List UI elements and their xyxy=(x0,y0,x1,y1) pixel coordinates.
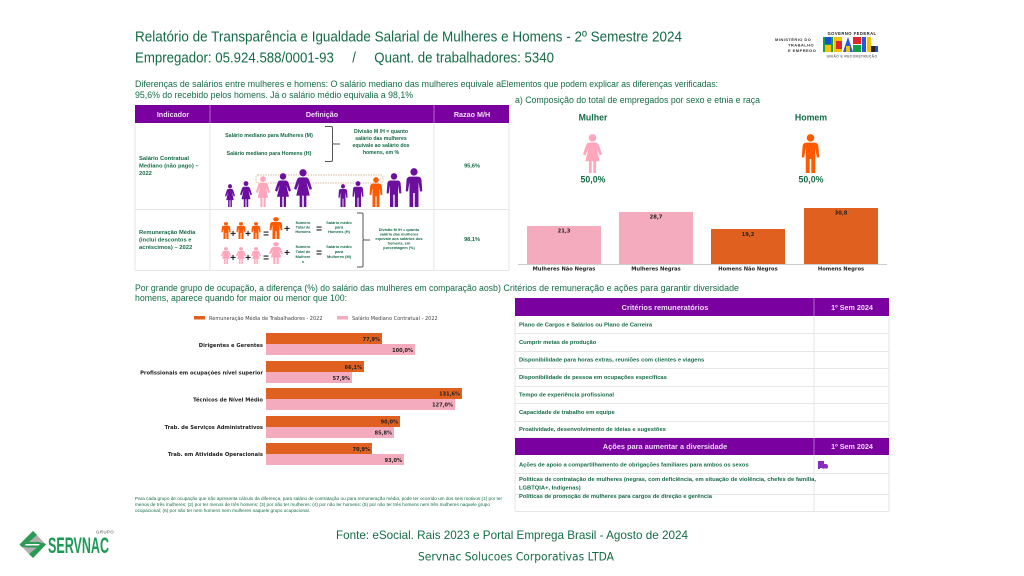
row: salário contratual mediano: salário das mulheres xyxy=(355,136,407,142)
row: remuneração média: = xyxy=(263,253,269,264)
logo: Ministério do Trabalho e Emprego: MINISTÉRIO DO xyxy=(775,37,811,42)
actions header: Ações para aumentar a diversidade xyxy=(603,442,727,451)
row: remuneração média: + xyxy=(284,224,290,235)
panel: criteria table: Disponibilidade de pessoa em ocupações específicas xyxy=(519,375,667,381)
row: remuneração média: + xyxy=(230,229,236,240)
panel: criteria table: Políticas de contratação de mulheres (negras, com deficiência, em situação de violência, chefes de família, xyxy=(519,477,816,483)
criteria header: Critérios remuneratórios xyxy=(622,303,708,312)
table header xyxy=(135,105,509,123)
heading: critérios: b) Critérios de remuneração e ações para garantir diversidade xyxy=(493,283,739,293)
row: remuneração média: + xyxy=(245,253,251,264)
row: remuneração média: Mulheres (M) xyxy=(327,254,352,259)
row: remuneração média: = xyxy=(263,229,269,240)
row: remuneração média: Total de xyxy=(296,249,311,254)
bar chart: composition by sex and race: Mulheres Não Negras xyxy=(533,266,595,272)
row: remuneração média: Homens (H) xyxy=(328,229,351,234)
table header: Indicador xyxy=(157,110,189,119)
panel: men share xyxy=(795,112,827,184)
row: salário contratual mediano: Salário mediano para Mulheres (M) xyxy=(225,133,313,139)
logo: Governo Federal Brasil: UNIÃO E RECONSTRUÇÃO xyxy=(827,54,877,58)
panel: criteria table: Cumprir metas de produção xyxy=(519,340,597,346)
row: remuneração média xyxy=(139,213,480,267)
bar chart: occupation groups: Trab. em Atividade Operacionais xyxy=(168,452,263,458)
row: remuneração média: Total de xyxy=(296,224,311,230)
bar chart: occupation groups: 77,9% xyxy=(363,337,380,343)
logo: Ministério do Trabalho e Emprego: E EMPREGO xyxy=(788,48,816,53)
row: remuneração média: Salário médio xyxy=(326,220,352,225)
row: salário contratual mediano: Salário mediano para Homens (H) xyxy=(227,151,312,157)
bar chart: occupation groups: 66,1% xyxy=(345,365,362,371)
row: remuneração média: 98,1% xyxy=(464,237,480,243)
legend: Salário Mediano Contratual - 2022 xyxy=(352,315,438,322)
row: remuneração média: + xyxy=(230,253,236,264)
row: salário contratual mediano: 95,6% xyxy=(464,164,480,170)
row: salário contratual mediano: equivale ao salário dos xyxy=(352,143,410,149)
source: Fonte: eSocial. Rais 2023 e Portal Emprega Brasil - Agosto de 2024 xyxy=(336,529,689,542)
panel: criteria table: Tempo de experiência profissional xyxy=(519,392,614,398)
row: remuneração média: = xyxy=(316,248,322,259)
row: remuneração média: Homens xyxy=(295,229,311,234)
footnote xyxy=(135,496,503,513)
logo: Ministério do Trabalho e Emprego: TRABALHO xyxy=(788,42,814,48)
row: remuneração média: salário das mulheres xyxy=(380,232,418,236)
intro text: occupation groups xyxy=(135,283,494,303)
heading: composição: a) Composição do total de empregados por sexo e etnia e raça xyxy=(515,95,760,105)
bar chart: composition by sex and race xyxy=(518,208,887,272)
footnote: menos de três mulheres; (2) por ter menos de três homens; (3) por não ter mulheres; (4) por não ter homens; (5) por não ter três homens nem três mulheres naquele grupo xyxy=(135,502,491,507)
panel: criteria table: Proatividade, desenvolvimento de ideias e sugestões xyxy=(519,427,666,433)
title xyxy=(135,30,682,66)
criteria header xyxy=(515,298,889,316)
bar chart: occupation groups: 85,8% xyxy=(375,430,392,436)
panel: criteria table: LGBTQIA+, Indígenas) xyxy=(519,486,581,492)
bar chart: composition by sex and race: Mulheres Negras xyxy=(631,266,681,272)
bar chart: composition by sex and race: 21,3 xyxy=(558,228,571,234)
company name: Servnac Solucoes Corporativas LTDA xyxy=(418,550,614,564)
row: salário contratual mediano: Salário Contratual xyxy=(139,156,189,162)
panel: indicator table xyxy=(135,105,509,270)
bar chart: occupation groups: Dirigentes e Gerentes xyxy=(199,343,263,349)
panel: men share: 50,0% xyxy=(799,174,824,184)
bar chart: occupation groups: Trab. de Serviços Administrativos xyxy=(165,425,263,431)
row: remuneração média: = xyxy=(316,224,322,235)
bar chart: occupation groups: 127,0% xyxy=(432,402,453,408)
intro text: differences in salaries: 95,6% do recebido pelos homens. Já o salário médio equivalia a 98,1% xyxy=(135,90,413,100)
bar chart: occupation groups: 57,9% xyxy=(333,376,350,382)
dashed highlight xyxy=(256,175,383,183)
bar chart: composition by sex and race: 28,7 xyxy=(650,214,663,220)
intro text: occupation groups: homens, aparece quando for maior ou menor que 100: xyxy=(135,293,347,303)
row: salário contratual mediano: 2022 xyxy=(139,171,152,177)
row: remuneração média: s xyxy=(302,259,304,264)
panel: women share xyxy=(579,112,608,184)
panel: criteria table: Plano de Cargos e Salários ou Plano de Carreira xyxy=(519,322,653,328)
row: remuneração média: Número xyxy=(296,244,311,249)
row: remuneração média: Número xyxy=(296,220,311,225)
people figures xyxy=(225,168,422,207)
panel: criteria table: Disponibilidade para horas extras, reuniões com clientes e viagens xyxy=(519,358,704,364)
table header: Razao M/H xyxy=(454,110,490,119)
row: remuneração média: para xyxy=(335,224,344,230)
row: remuneração média: Divisão M /H = quanto xyxy=(379,227,420,232)
row: remuneração média: + xyxy=(284,248,290,259)
row: salário contratual mediano: Mediano (não pago) – xyxy=(139,164,199,170)
panel: criteria table: Capacidade de trabalho em equipe xyxy=(519,410,615,416)
actions header xyxy=(515,438,889,455)
logo: Servnac: GRUPO xyxy=(96,530,114,534)
legend: Remuneração Média de Trabalhadores - 2022 xyxy=(209,315,323,322)
bar chart: composition by sex and race: 30,8 xyxy=(835,210,848,216)
logo: Ministério do Trabalho e Emprego xyxy=(775,37,816,53)
row: remuneração média: Mulhere xyxy=(296,254,311,259)
bar chart: composition by sex and race: Homens Negros xyxy=(818,266,864,272)
row: salário contratual mediano xyxy=(139,126,480,207)
logo: Servnac: SERVNAC xyxy=(48,533,109,558)
row: remuneração média: Remuneração Média xyxy=(139,230,196,236)
intro text: elements: Elementos que podem explicar as diferenças verificadas: xyxy=(501,79,718,89)
row: remuneração média: (inclui descontos e xyxy=(139,238,192,244)
intro text: differences in salaries: Diferenças de salários entre mulheres e homens: O salário mediano das mulheres equivale a xyxy=(135,79,501,89)
title: Empregador: 05.924.588/0001-93 / Quant. de trabalhadores: 5340 xyxy=(135,50,554,66)
icon: purple marker xyxy=(818,461,828,469)
bar chart: composition by sex and race: 19,2 xyxy=(742,232,755,238)
row: remuneração média: porcentagem (%) xyxy=(383,245,415,250)
intro text: differences in salaries xyxy=(135,79,501,100)
bar chart: occupation groups: 131,6% xyxy=(439,392,460,398)
row: remuneração média: equivale aos salários dos xyxy=(375,236,423,241)
legend xyxy=(194,315,438,322)
row: remuneração média: para xyxy=(335,249,344,254)
logo: Servnac xyxy=(20,530,114,558)
row: salário contratual mediano: homens, em % xyxy=(363,150,400,156)
row: salário contratual mediano: Divisão M /H = quanto xyxy=(354,129,408,135)
bar chart: composition by sex and race: Homens Não Negros xyxy=(718,266,778,272)
logo: Governo Federal Brasil xyxy=(823,31,878,58)
row: remuneração média: homens, em xyxy=(388,240,411,246)
title: Relatório de Transparência e Igualdade Salarial de Mulheres e Homens - 2º Semestre 2024 xyxy=(135,30,682,46)
logo: Governo Federal Brasil: GOVERNO FEDERAL xyxy=(827,31,877,36)
bar chart: occupation groups: Técnicos de Nível Médio xyxy=(193,396,263,404)
panel: criteria table xyxy=(515,298,889,512)
bar chart: occupation groups: 90,0% xyxy=(381,420,398,426)
bar chart: occupation groups xyxy=(140,333,462,465)
criteria header: 1º Sem 2024 xyxy=(831,303,873,312)
actions header: 1º Sem 2024 xyxy=(831,442,873,451)
panel: men share: Homem xyxy=(795,112,827,122)
table header: Definição xyxy=(306,110,339,119)
bar chart: occupation groups: Profissionais em ocupações nível superior xyxy=(140,370,263,376)
row: remuneração média: Salário médio xyxy=(326,244,352,249)
bar chart: occupation groups: 70,9% xyxy=(353,447,370,453)
footnote: Para cada grupo de ocupação que não apresenta cálculo da diferença, para salário de contratação ou para remuneração média, pode ter ocorrido um dos seis motivos:(1) por ter xyxy=(135,496,503,501)
intro text: occupation groups: Por grande grupo de ocupação, a diferença (%) do salário das mulheres em comparação aos xyxy=(135,283,494,293)
row: remuneração média: + xyxy=(245,229,251,240)
panel: criteria table: Ações de apoio a compartilhamento de obrigações familiares para ambos os sexos xyxy=(519,462,749,468)
panel: women share: 50,0% xyxy=(581,174,606,184)
bar chart: occupation groups: 100,0% xyxy=(392,348,413,354)
row: remuneração média: acréscimos) – 2022 xyxy=(139,245,192,251)
panel: criteria table: Políticas de promoção de mulheres para cargos de direção e gerência xyxy=(519,494,713,500)
panel: women share: Mulher xyxy=(579,112,608,122)
bar chart: occupation groups: 93,0% xyxy=(385,458,402,464)
footnote: ocupacional; (6) por não ter nem homens nem mulheres naquele grupo ocupacional. xyxy=(135,508,310,513)
